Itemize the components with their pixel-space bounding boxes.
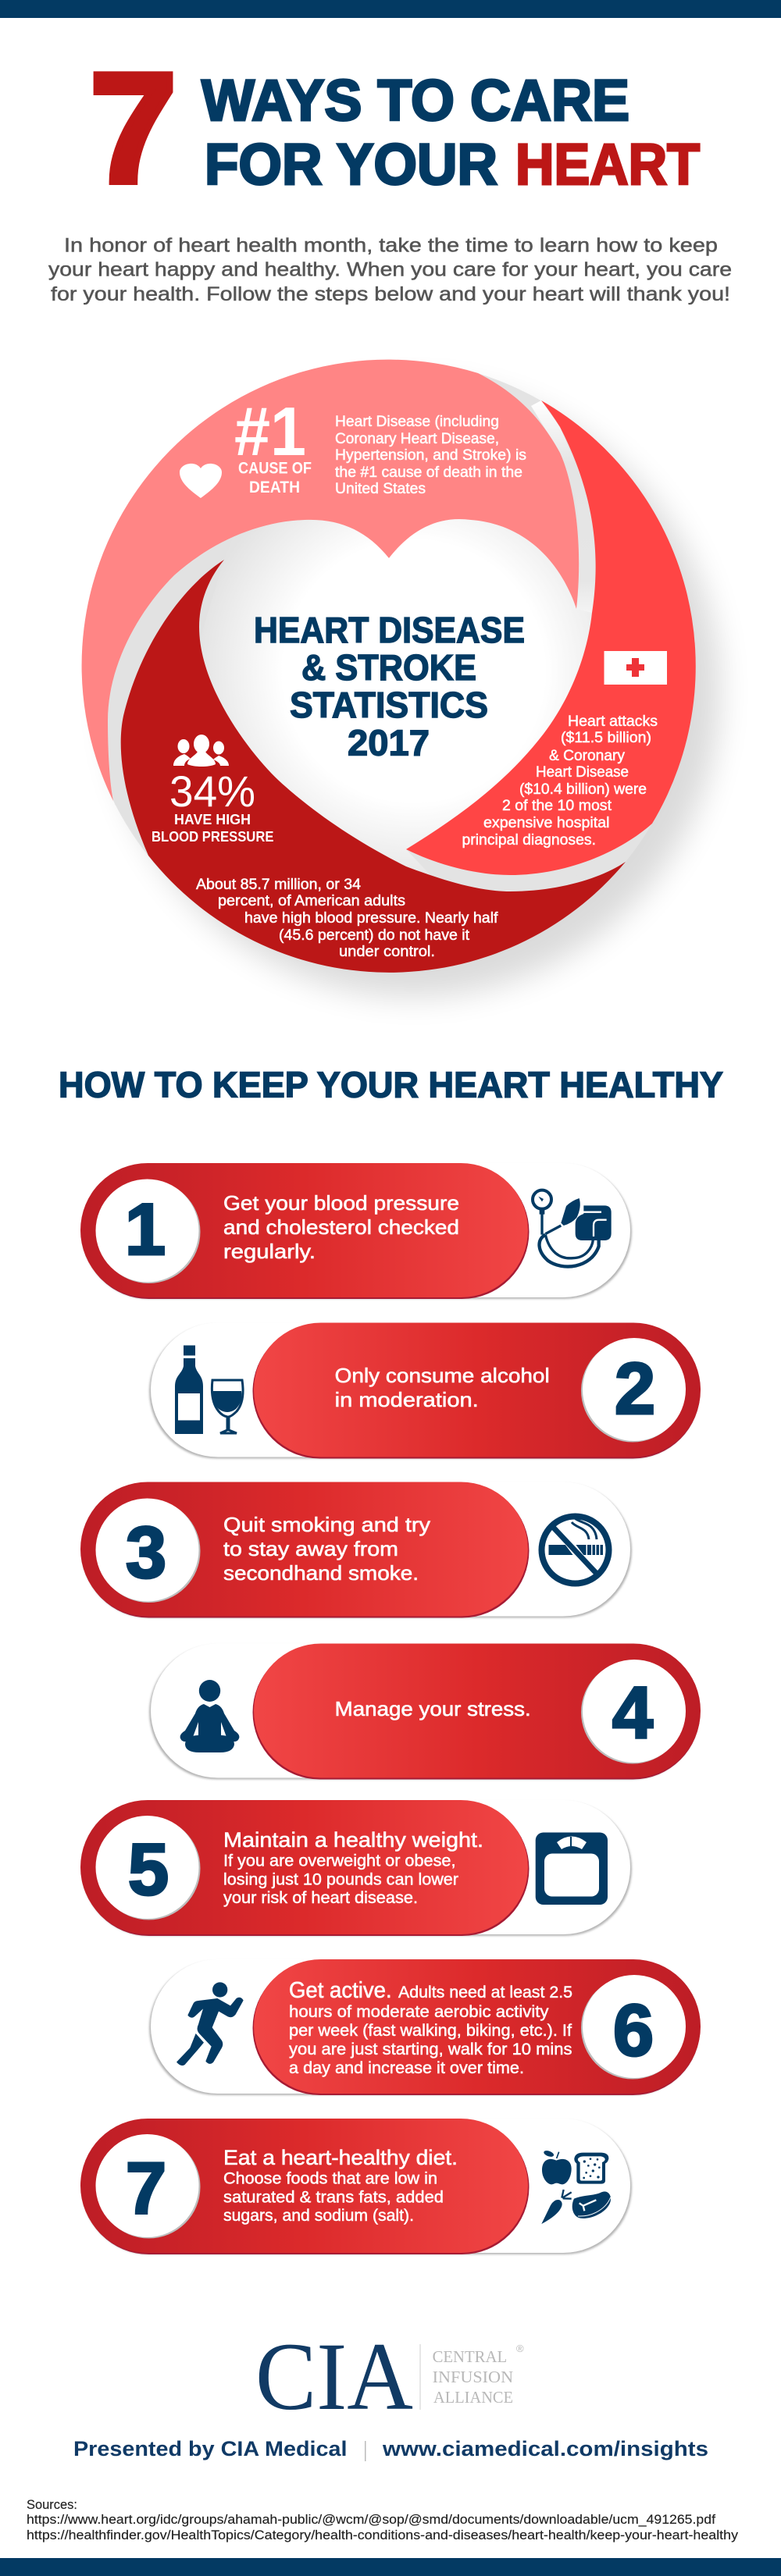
high blood pressure statistic bbox=[152, 767, 273, 845]
pink segment bbox=[82, 360, 579, 801]
step 6 bbox=[149, 1959, 701, 2095]
intro text bbox=[48, 234, 732, 305]
hospital diagnoses text: Heart Disease bbox=[536, 764, 629, 781]
icon: meditating person bbox=[180, 1680, 239, 1752]
icon: healthy foods bbox=[541, 2150, 611, 2224]
sources bbox=[27, 2497, 739, 2542]
icon: no smoking bbox=[542, 1516, 609, 1583]
bottom bar bbox=[0, 2558, 781, 2576]
step 3 text bbox=[223, 1513, 430, 1585]
step 2 number: 2 bbox=[615, 1347, 655, 1429]
section heading: HOW TO KEEP YOUR HEART HEALTHY bbox=[59, 1065, 723, 1105]
bright red segment bbox=[406, 400, 696, 875]
icon: wine bottle and glass bbox=[175, 1346, 243, 1434]
sources: https://healthfinder.gov/HealthTopics/Category/health-conditions-and-diseases/heart-health/keep-your-heart-healthy bbox=[27, 2528, 739, 2542]
cause of death description: Hypertension, and Stroke) is bbox=[335, 447, 526, 464]
step 1 text: and cholesterol checked bbox=[223, 1215, 459, 1239]
step 4 number: 4 bbox=[612, 1671, 653, 1753]
cause of death description: Coronary Heart Disease, bbox=[335, 431, 499, 447]
step 2 text: in moderation. bbox=[335, 1388, 479, 1411]
step 7 text: sugars, and sodium (salt). bbox=[223, 2206, 414, 2225]
big number seven: 7 bbox=[90, 41, 177, 215]
step 2 text bbox=[335, 1364, 550, 1411]
hospital diagnoses text: principal diagnoses. bbox=[462, 832, 596, 849]
step 4 text: Manage your stress. bbox=[335, 1697, 531, 1720]
number one statistic: DEATH bbox=[249, 479, 300, 496]
step 6 number: 6 bbox=[613, 1989, 654, 2071]
step 7 number: 7 bbox=[126, 2147, 166, 2229]
hospital diagnoses text: & Coronary bbox=[549, 748, 625, 764]
intro text: for your health. Follow the steps below and your heart will thank you! bbox=[51, 283, 730, 305]
step 2 bbox=[149, 1322, 701, 1458]
cause of death description: United States bbox=[335, 481, 426, 497]
step 5 text bbox=[223, 1828, 483, 1907]
title line one: WAYS TO CARE bbox=[201, 68, 629, 133]
center heading bbox=[254, 610, 525, 763]
blood pressure description: have high blood pressure. Nearly half bbox=[244, 910, 498, 927]
title line two: FOR YOUR bbox=[205, 132, 497, 197]
blood pressure description: About 85.7 million, or 34 bbox=[196, 877, 361, 893]
step 5 text: losing just 10 pounds can lower bbox=[223, 1870, 458, 1889]
step 6 text: Adults need at least 2.5 bbox=[398, 1983, 572, 2001]
center heading: & STROKE bbox=[301, 647, 476, 688]
step 4 bbox=[149, 1644, 701, 1780]
intro text: your heart happy and healthy. When you care for your heart, you care bbox=[48, 259, 732, 281]
title bbox=[90, 41, 700, 215]
icon: people bbox=[173, 735, 229, 767]
step 1 bbox=[80, 1163, 632, 1299]
step 6 text: hours of moderate aerobic activity bbox=[289, 2002, 549, 2021]
step 3 number: 3 bbox=[126, 1511, 166, 1593]
logo: CIA: ® bbox=[516, 2343, 524, 2354]
step 6 text: a day and increase it over time. bbox=[289, 2058, 524, 2077]
step 3 text: to stay away from bbox=[223, 1537, 398, 1560]
presented by line: Presented by CIA Medical bbox=[73, 2437, 347, 2460]
cause of death description bbox=[335, 414, 526, 497]
sources: Sources: bbox=[27, 2497, 77, 2512]
blood pressure description: (45.6 percent) do not have it bbox=[279, 927, 470, 944]
high blood pressure statistic: BLOOD PRESSURE bbox=[152, 828, 273, 845]
dark red segment bbox=[121, 560, 626, 973]
step 7 bbox=[80, 2119, 632, 2254]
intro text: In honor of heart health month, take the time to learn how to keep bbox=[64, 234, 718, 256]
logo: CIA bbox=[255, 2323, 524, 2430]
step 5 number: 5 bbox=[128, 1828, 169, 1910]
hospital diagnoses text bbox=[462, 713, 658, 849]
logo: CIA: CIA bbox=[255, 2323, 413, 2430]
step 3 bbox=[80, 1482, 632, 1617]
icon: runner bbox=[177, 1982, 244, 2065]
step 7 text: Eat a heart-healthy diet. bbox=[223, 2146, 458, 2169]
high blood pressure statistic: HAVE HIGH bbox=[174, 811, 251, 827]
center heading: HEART DISEASE bbox=[254, 610, 525, 650]
step 1 text bbox=[223, 1191, 459, 1263]
presented by line: www.ciamedical.com/insights bbox=[382, 2437, 708, 2460]
logo: CIA: CENTRAL bbox=[433, 2347, 507, 2366]
cause of death description: Heart Disease (including bbox=[335, 414, 499, 430]
icon: blood pressure monitor bbox=[533, 1190, 612, 1267]
wheel shapes bbox=[82, 360, 720, 997]
blood pressure description: under control. bbox=[339, 944, 435, 960]
center heading: 2017 bbox=[348, 723, 430, 763]
blood pressure description: percent, of American adults bbox=[218, 893, 405, 909]
step 1 text: Get your blood pressure bbox=[223, 1191, 459, 1215]
hospital diagnoses text: expensive hospital bbox=[483, 815, 609, 831]
title highlight word: HEART bbox=[515, 132, 700, 197]
icon: hospital flag bbox=[604, 651, 667, 685]
step 6 text bbox=[289, 1978, 572, 2077]
step 5 text: your risk of heart disease. bbox=[223, 1888, 418, 1907]
hospital diagnoses text: ($11.5 billion) bbox=[561, 730, 651, 746]
blood pressure description bbox=[196, 877, 498, 960]
step 1 text: regularly. bbox=[223, 1240, 316, 1263]
presented by line bbox=[73, 2437, 708, 2461]
step 1 number: 1 bbox=[125, 1188, 166, 1270]
sources: https://www.heart.org/idc/groups/ahamah-public/@wcm/@sop/@smd/documents/downloadable/ucm_491265.pdf bbox=[27, 2512, 715, 2527]
cause of death description: the #1 cause of death in the bbox=[335, 464, 522, 481]
high blood pressure statistic: 34% bbox=[169, 767, 255, 816]
step 3 text: Quit smoking and try bbox=[223, 1513, 430, 1536]
icon: heart bbox=[180, 464, 222, 498]
top bar bbox=[0, 0, 781, 18]
step 5 text: Maintain a healthy weight. bbox=[223, 1828, 483, 1852]
step 7 text: Choose foods that are low in bbox=[223, 2169, 437, 2187]
number one statistic: #1 bbox=[234, 393, 306, 470]
statistics wheel bbox=[82, 360, 720, 997]
hospital diagnoses text: Heart attacks bbox=[568, 713, 658, 730]
step 6 text: per week (fast walking, biking, etc.). If bbox=[289, 2021, 572, 2040]
number one statistic: CAUSE OF bbox=[238, 459, 312, 478]
icon: weight scale bbox=[536, 1833, 608, 1905]
step 6 text: you are just starting, walk for 10 mins bbox=[289, 2040, 572, 2058]
logo: CIA: ALLIANCE bbox=[433, 2388, 513, 2407]
step 5 text: If you are overweight or obese, bbox=[223, 1852, 456, 1870]
hospital diagnoses text: ($10.4 billion) were bbox=[519, 781, 647, 798]
hospital diagnoses text: 2 of the 10 most bbox=[502, 798, 612, 814]
step 2 text: Only consume alcohol bbox=[335, 1364, 550, 1387]
step 7 text bbox=[223, 2146, 458, 2225]
center heading: STATISTICS bbox=[290, 685, 488, 725]
step 3 text: secondhand smoke. bbox=[223, 1561, 419, 1585]
step 6 text: Get active. bbox=[289, 1978, 392, 2003]
step 7 text: saturated & trans fats, added bbox=[223, 2187, 444, 2206]
step 5 bbox=[80, 1800, 632, 1936]
logo: CIA: INFUSION bbox=[433, 2368, 513, 2386]
